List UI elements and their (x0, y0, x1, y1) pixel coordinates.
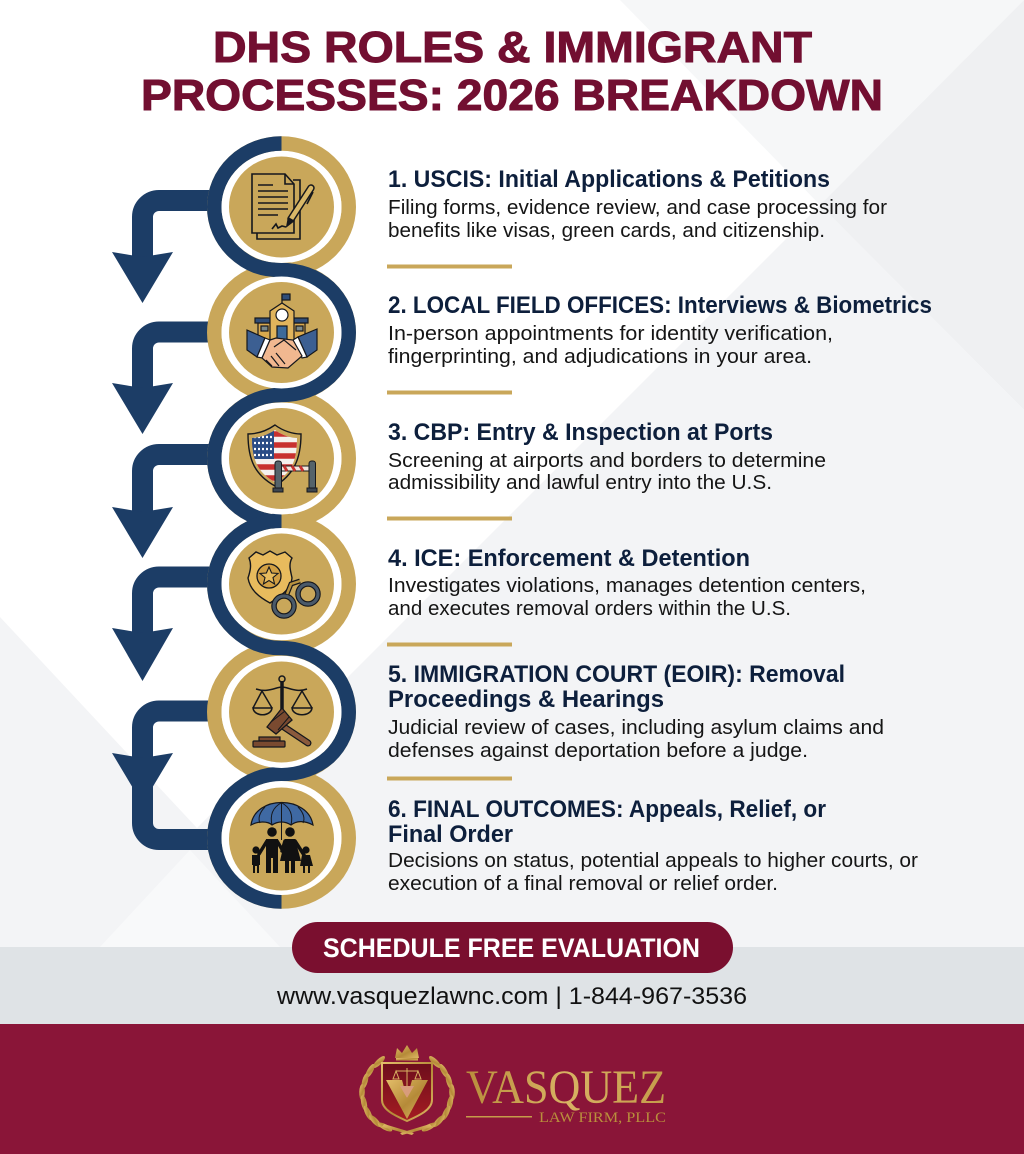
contact line: www.vasquezlawnc.com | 1-844-967-3536 (276, 983, 747, 1010)
step 5 text: 5. IMMIGRATION COURT (EOIR): Removal (388, 661, 845, 688)
step 4 badge (222, 528, 342, 640)
step 3 text (388, 419, 826, 494)
step 3 text: admissibility and lawful entry into the U.S. (388, 472, 772, 494)
title: DHS ROLES & IMMIGRANT (213, 24, 812, 72)
arrow 1 (112, 200, 214, 303)
step 4 text: 4. ICE: Enforcement & Detention (388, 545, 750, 572)
arrow 3 (112, 454, 214, 558)
arrow 5 (112, 711, 214, 804)
step 6 text (388, 796, 918, 895)
logo emblem (359, 1045, 455, 1135)
step 1 text: Filing forms, evidence review, and case processing for (388, 197, 887, 219)
arrow 2 (112, 332, 214, 434)
step 5 badge (222, 656, 342, 768)
step 3 text: 3. CBP: Entry & Inspection at Ports (388, 419, 773, 446)
step 1 text: benefits like visas, green cards, and citizenship. (388, 220, 825, 242)
icon: badge and handcuffs (248, 551, 318, 616)
logo: LAW FIRM, PLLC (539, 1110, 666, 1126)
step 5 text: defenses against deportation before a judge. (388, 740, 808, 762)
footer band (0, 1024, 1024, 1154)
contact band (0, 947, 1024, 1024)
process flow arrows (112, 200, 214, 840)
icon: family under umbrella (251, 802, 313, 873)
step 5 text: Judicial review of cases, including asylum claims and (388, 717, 884, 739)
step 2 badge (222, 276, 342, 388)
step 1 text: 1. USCIS: Initial Applications & Petitions (388, 166, 830, 193)
call to action button: SCHEDULE FREE EVALUATION (323, 933, 700, 963)
title: PROCESSES: 2026 BREAKDOWN (141, 72, 883, 120)
step 4 text: Investigates violations, manages detention centers, (388, 575, 866, 597)
icon: scales and gavel (253, 676, 312, 747)
logo wordmark: VASQUEZ (466, 1061, 666, 1114)
icon: flag shield and barrier (248, 425, 317, 492)
step 6 text: 6. FINAL OUTCOMES: Appeals, Relief, or (388, 796, 826, 823)
step 6 text: Final Order (388, 821, 513, 848)
step 6 badge (222, 781, 342, 895)
navy serpentine ring path (214, 144, 349, 902)
icon: document and pen (252, 174, 313, 239)
icon: building and handshake (247, 294, 317, 368)
step 3 badge (222, 402, 342, 514)
arrow 4 (112, 577, 214, 681)
step 6 text: Decisions on status, potential appeals to higher courts, or (388, 850, 918, 872)
step 6 text: execution of a final removal or relief order. (388, 873, 778, 895)
step 3 text: Screening at airports and borders to determine (388, 450, 826, 472)
step 2 text: fingerprinting, and adjudications in your area. (388, 346, 812, 368)
logo (359, 1045, 666, 1135)
step 1 text (388, 166, 887, 242)
step 4 text: and executes removal orders within the U.S. (388, 598, 791, 620)
step 2 text: In-person appointments for identity verification, (388, 323, 833, 345)
step 4 text (388, 545, 866, 620)
connector 6 (142, 770, 214, 840)
gold rings (214, 144, 349, 902)
step 2 text (388, 292, 932, 368)
call to action button (292, 922, 733, 973)
step 5 text (388, 661, 884, 762)
step 5 text: Proceedings & Hearings (388, 686, 664, 713)
step 2 text: 2. LOCAL FIELD OFFICES: Interviews & Biometrics (388, 292, 932, 319)
step 1 badge (222, 151, 342, 263)
title (141, 24, 883, 120)
